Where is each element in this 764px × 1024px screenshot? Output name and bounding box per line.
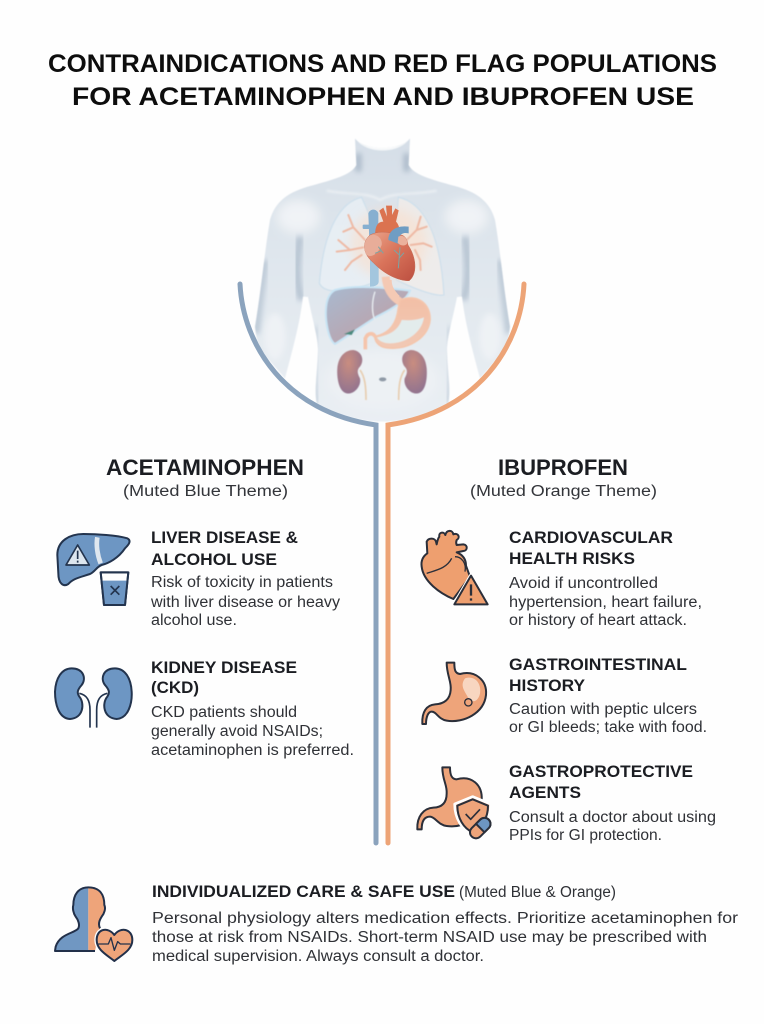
text: kidney disease: KIDNEY DISEASE — [151, 658, 297, 677]
kidneys — [337, 350, 427, 400]
text: gastrointestinal: HISTORY — [509, 676, 586, 695]
item: gastroprotective agents — [417, 762, 716, 844]
text: footer: Personal physiology alters medication effects. Prioritize acetaminophen for — [152, 910, 738, 927]
text: liver disease — [150, 528, 340, 629]
text: footer — [152, 882, 738, 965]
text: kidney disease: CKD patients should — [151, 704, 297, 721]
text: liver disease: LIVER DISEASE & — [151, 528, 298, 547]
text: footer: (Muted Blue & Orange) — [459, 884, 616, 901]
text: cardiovascular: or history of heart attack. — [509, 612, 687, 629]
text: liver disease: ALCOHOL USE — [151, 550, 277, 569]
footer: individualized care and safe use — [55, 882, 738, 965]
text: gastroprotective: Consult a doctor about using — [509, 809, 716, 826]
text: liver disease: alcohol use. — [151, 612, 237, 629]
blue arc and vertical line — [240, 284, 376, 843]
acetaminophen heading: ACETAMINOPHEN — [106, 455, 304, 480]
icon: stomach with ulcer — [422, 663, 486, 724]
text: kidney disease: acetaminophen is preferred. — [151, 742, 354, 759]
stomach — [365, 277, 430, 349]
anatomical torso illustration — [250, 133, 517, 427]
title: FOR ACETAMINOPHEN AND IBUPROFEN USE — [72, 83, 694, 111]
ibuprofen heading: (Muted Orange Theme) — [470, 483, 657, 500]
item: gastrointestinal history — [422, 655, 707, 736]
text: gastrointestinal: GASTROINTESTINAL — [509, 655, 687, 674]
text: footer: INDIVIDUALIZED CARE & SAFE USE — [152, 882, 455, 901]
text: gastrointestinal: or GI bleeds; take with food. — [509, 719, 707, 736]
acetaminophen heading — [106, 455, 304, 500]
item: liver disease and alcohol use — [57, 528, 340, 629]
title — [48, 50, 717, 111]
text: cardiovascular: CARDIOVASCULAR — [509, 528, 673, 547]
text: gastroprotective: PPIs for GI protection. — [509, 827, 662, 844]
text: footer: medical supervision. Always consult a doctor. — [152, 948, 484, 965]
lungs — [319, 197, 444, 295]
text: gastrointestinal — [509, 655, 707, 736]
text: liver disease: Risk of toxicity in patients — [151, 574, 333, 591]
text: cardiovascular — [509, 528, 702, 629]
liver — [326, 287, 410, 344]
icon: person with heart — [55, 887, 132, 961]
text: gastrointestinal: Caution with peptic ulcers — [509, 701, 697, 718]
text: kidney disease: generally avoid NSAIDs; — [151, 723, 323, 740]
torso silhouette — [250, 133, 517, 427]
text: cardiovascular: HEALTH RISKS — [509, 549, 635, 568]
text: footer: those at risk from NSAIDs. Short-term NSAID use may be prescribed with — [152, 929, 707, 946]
orange arc and vertical line — [388, 284, 524, 843]
icon: heart with warning — [421, 531, 488, 604]
text: liver disease: with liver disease or heavy — [150, 594, 340, 611]
icon: stomach with shield and pill — [417, 767, 493, 841]
title: CONTRAINDICATIONS AND RED FLAG POPULATIONS — [48, 50, 717, 78]
text: kidney disease: (CKD) — [151, 678, 199, 697]
heart with vessels and lung branches — [337, 206, 432, 298]
icon: liver with warning and glass — [57, 534, 130, 605]
text: cardiovascular: Avoid if uncontrolled — [509, 575, 658, 592]
text: cardiovascular: hypertension, heart failure, — [509, 594, 702, 611]
acetaminophen heading: (Muted Blue Theme) — [123, 483, 288, 500]
item: cardiovascular health risks — [421, 528, 702, 629]
ibuprofen heading — [470, 455, 657, 500]
icon: kidneys — [55, 668, 132, 728]
text: kidney disease — [151, 658, 354, 759]
text: gastroprotective: GASTROPROTECTIVE — [509, 762, 693, 781]
ibuprofen heading: IBUPROFEN — [498, 455, 628, 480]
item: kidney disease — [55, 658, 354, 759]
text: gastroprotective: AGENTS — [509, 783, 581, 802]
text: gastroprotective — [509, 762, 716, 844]
